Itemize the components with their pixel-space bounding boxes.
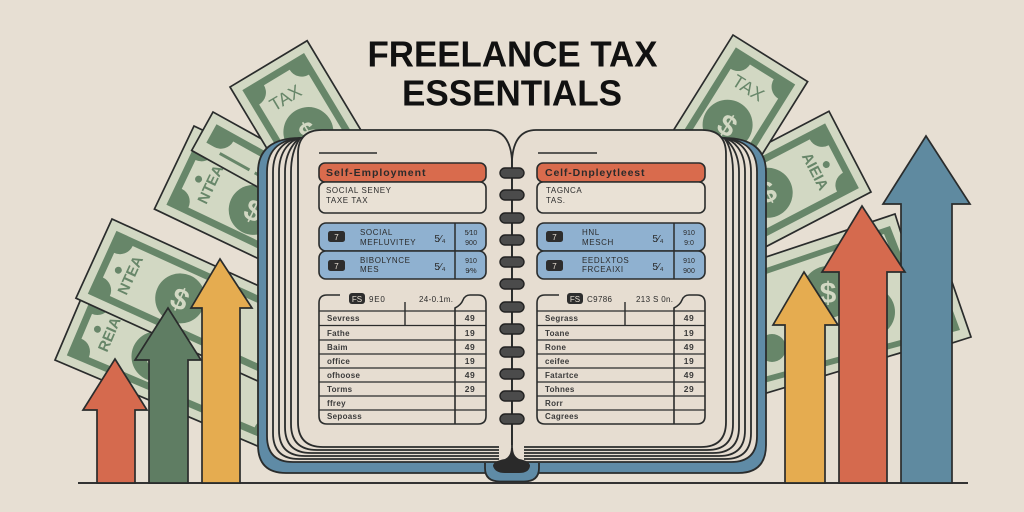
banknote: lower back left: REIA (95, 315, 125, 354)
banknote: lower back left: $ (142, 339, 170, 376)
left table: Sevress (327, 314, 360, 323)
left blue row 2: 5⁄₄ (434, 262, 446, 273)
right table: 49 (684, 313, 694, 323)
arrow: right red (822, 206, 905, 483)
spine (493, 155, 530, 473)
left table: office (327, 357, 350, 366)
left blue row 1: SOCIAL (360, 228, 393, 237)
icon: right table receipt (567, 293, 583, 304)
title: ESSENTIALS (402, 72, 622, 114)
text block: right description: TAGNCA (546, 186, 582, 195)
banknote: lower front left: NTEA (115, 253, 147, 298)
right blue row 1: MESCH (582, 238, 614, 247)
banknote: TAX top left (230, 41, 384, 216)
right table: 49 (684, 370, 694, 380)
right blue row 1: HNL (582, 228, 600, 237)
arrow: left red (83, 359, 147, 483)
banknote: middle right (652, 111, 871, 284)
text block: left description: SOCIAL SENEY (326, 186, 392, 195)
icon: right table receipt: FS (570, 295, 580, 304)
right blue row 2: FRCEAIXI (582, 265, 624, 274)
banknote: TAX top left: $ (294, 115, 325, 152)
left blue row 2: 9⁄% (465, 268, 477, 275)
right blue row 2 (537, 251, 705, 279)
title: FREELANCE TAX (368, 34, 658, 74)
left table: 49 (465, 313, 475, 323)
left blue row 2: BIBOLYNCE (360, 256, 411, 265)
banknote: TAX top right: TAX (729, 71, 768, 106)
text block: right description: TAS. (546, 196, 566, 205)
title (368, 34, 658, 114)
right page (512, 130, 726, 447)
right blue row 2: 900 (683, 268, 695, 275)
left table (319, 293, 486, 424)
right blue row 1 (537, 223, 705, 251)
left blue row 2 (319, 251, 486, 279)
banknote: TAX top left: TAX (266, 81, 305, 115)
text block: left description: TAXE TAX (326, 196, 368, 205)
right table: 213 S 0n. (636, 295, 673, 304)
heading: left red bar (319, 163, 486, 182)
left table: 9E0 (369, 295, 386, 304)
left blue row 1 (319, 223, 486, 251)
left table: 49 (465, 342, 475, 352)
left table: Fathe (327, 329, 350, 338)
left table: 29 (465, 384, 475, 394)
right blue row 2: 5⁄₄ (652, 262, 664, 273)
left page (298, 130, 512, 447)
left table: ofhoose (327, 371, 360, 380)
left blue row 2: MES (360, 265, 379, 274)
banknote: upper strip left (192, 112, 309, 204)
banknote: lower right: $ (820, 277, 837, 310)
right table: 19 (684, 356, 694, 366)
right table (537, 293, 705, 424)
banknote: lower front left (76, 219, 330, 398)
right blue row 2: EEDLXTOS (582, 256, 629, 265)
right table: Segrass (545, 314, 578, 323)
arrow: right yellow (773, 272, 838, 483)
open book (258, 122, 766, 482)
right blue row 2: 910 (683, 258, 695, 265)
banknote: upper back left (154, 126, 375, 295)
left blue row 1: MEFLUVITEY (360, 238, 416, 247)
icon: left table receipt: FS (352, 295, 362, 304)
banknote: lower front left: $ (165, 281, 194, 318)
heading: right red bar (537, 163, 705, 182)
icon: left table receipt (349, 293, 365, 304)
right table: Cagrees (545, 412, 579, 421)
left table: 19 (465, 356, 475, 366)
left blue row 1: 5⁄10 (465, 230, 478, 237)
banknote: upper back left: NTEA (194, 162, 227, 207)
right blue row 1: 910 (683, 230, 695, 237)
left table: 19 (465, 328, 475, 338)
arrow: left yellow (191, 259, 252, 483)
left blue row 1: 7 (334, 233, 339, 242)
book cover (258, 138, 766, 473)
left table: 24-0.1m. (419, 295, 453, 304)
right table: Tohnes (545, 385, 575, 394)
left table: ffrey (327, 399, 346, 408)
heading: right red bar: Celf-Dnpleytleest (545, 167, 645, 179)
baseline (78, 482, 968, 484)
right blue row 2: 7 (552, 262, 557, 271)
banknotes right (652, 35, 971, 395)
panel: right page content (537, 153, 705, 424)
left blue row 2: 910 (465, 258, 477, 265)
spiral rings (500, 168, 524, 424)
left table: Torms (327, 385, 353, 394)
text block: left description (319, 182, 486, 213)
banknote: TAX top right (654, 35, 808, 209)
left blue row 1: 5⁄₄ (434, 234, 446, 245)
banknote: lower back left (55, 280, 310, 454)
text block: right description (537, 182, 705, 213)
right table: Rorr (545, 399, 563, 408)
right table: 19 (684, 328, 694, 338)
banknote: upper back left: $ (238, 193, 268, 230)
arrow: left green (135, 308, 201, 483)
right table: C9786 (587, 295, 613, 304)
page stack (267, 122, 757, 462)
right blue row 1: 7 (552, 233, 557, 242)
right table: 29 (684, 384, 694, 394)
banknote: middle right: $ (752, 173, 782, 210)
right table: Rone (545, 343, 566, 352)
left table: Baim (327, 343, 348, 352)
right table: Fatartce (545, 371, 579, 380)
right blue row 1: 9:0 (684, 240, 694, 247)
heading: left red bar: Self-Employment (326, 167, 426, 179)
left table: 49 (465, 370, 475, 380)
panel: left page content (319, 153, 486, 424)
right table: Toane (545, 329, 570, 338)
banknote: TAX top right: $ (711, 108, 743, 145)
arrow: right blue (883, 136, 970, 483)
banknotes left (55, 41, 384, 454)
right table: ceifee (545, 357, 570, 366)
banknote: lower right (758, 214, 971, 395)
banknote: middle right: AIEIA (798, 150, 832, 193)
right table: 49 (684, 342, 694, 352)
left blue row 1: 900 (465, 240, 477, 247)
left table: Sepoass (327, 412, 362, 421)
right blue row 1: 5⁄₄ (652, 234, 664, 245)
spine tab (485, 463, 539, 482)
left blue row 2: 7 (334, 262, 339, 271)
